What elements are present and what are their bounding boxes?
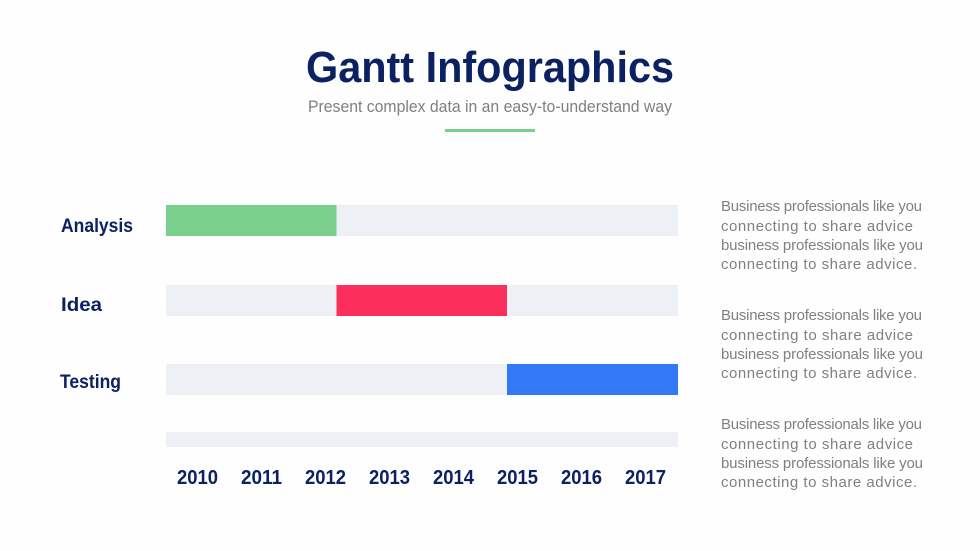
year axis labels: 2017 bbox=[625, 467, 666, 489]
row: Idea bar bbox=[166, 285, 678, 316]
row: Testing bar bbox=[166, 364, 678, 395]
row label: Analysis: Analysis bbox=[61, 216, 133, 237]
year axis labels: 2014 bbox=[433, 467, 475, 489]
text block: Testing description: business professionals like you bbox=[721, 455, 923, 472]
text block: Idea description: connecting to share advice. bbox=[721, 365, 917, 382]
text block: Testing description: connecting to share advice. bbox=[721, 474, 917, 491]
text block: Analysis description: Business professionals like you bbox=[721, 198, 922, 215]
year axis labels bbox=[177, 467, 666, 489]
gantt chart bbox=[166, 205, 678, 489]
row label: Testing: Testing bbox=[60, 372, 121, 393]
text block: Testing description bbox=[721, 416, 923, 491]
year axis labels: 2013 bbox=[369, 467, 410, 489]
text block: Analysis description: business professionals like you bbox=[721, 237, 923, 254]
year axis labels: 2015 bbox=[497, 467, 538, 489]
title: Gantt Infographics bbox=[306, 43, 674, 92]
year axis labels: 2010 bbox=[177, 467, 218, 489]
year axis labels: 2016 bbox=[561, 467, 602, 489]
text block: Analysis description: connecting to share advice bbox=[721, 218, 913, 235]
text block: Idea description: business professionals like you bbox=[721, 346, 923, 363]
text block: Idea description bbox=[721, 307, 923, 382]
year axis labels: 2012 bbox=[305, 467, 346, 489]
text block: Analysis description bbox=[721, 198, 923, 273]
row: empty axis bar bbox=[166, 432, 678, 447]
year axis labels: 2011 bbox=[241, 467, 282, 489]
subtitle: Present complex data in an easy-to-understand way bbox=[308, 98, 673, 116]
text block: Analysis description: connecting to share advice. bbox=[721, 256, 917, 273]
row label: Idea: Idea bbox=[61, 295, 102, 316]
text block: Testing description: connecting to share advice bbox=[721, 436, 913, 453]
text block: Testing description: Business professionals like you bbox=[721, 416, 922, 433]
text block: Idea description: connecting to share advice bbox=[721, 327, 913, 344]
title underline bbox=[445, 129, 535, 132]
text block: Idea description: Business professionals like you bbox=[721, 307, 922, 324]
row: Analysis bar bbox=[166, 205, 678, 236]
